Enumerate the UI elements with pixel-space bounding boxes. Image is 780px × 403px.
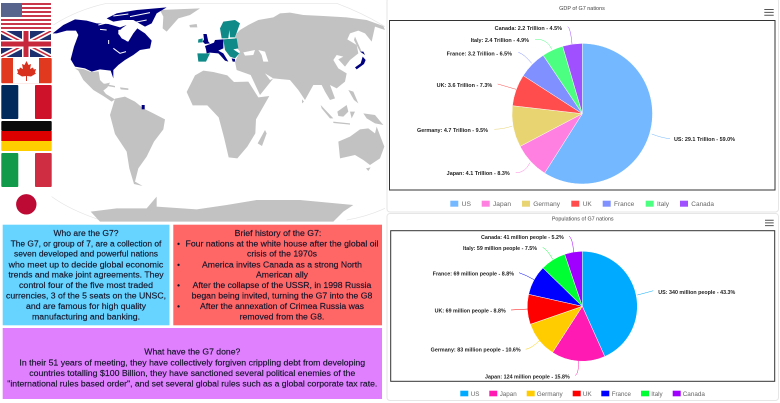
- population data labels: France: 69 million people - 8.8%: [433, 272, 515, 278]
- gdp legend: UK: [583, 201, 592, 208]
- panel: brief history of the g7: After the annexation of Crimea Russia was: [200, 302, 364, 311]
- chart title: gdp: GDP of G7 nations: [559, 6, 605, 12]
- channels and great lakes: [98, 13, 150, 53]
- gdp legend: Germany: [533, 201, 561, 208]
- panel: what have the g7 done: [3, 328, 382, 399]
- panel: brief history of the g7: •: [177, 281, 180, 290]
- panel: brief history of the g7: •: [177, 239, 180, 248]
- panel: what have the g7 done: "international rules based order", and set several global rules such as a global corporate tax rate.: [7, 380, 377, 389]
- flag: italy: [1, 153, 52, 187]
- gdp pie: [512, 43, 652, 184]
- panel: gdp chart: [387, 0, 778, 212]
- population plot frame: [391, 231, 775, 381]
- population connectors: [511, 236, 653, 375]
- population legend: Japan: [500, 391, 517, 398]
- population data labels: US: 340 million people - 43.3%: [658, 290, 736, 296]
- panel: who are the g7: and are famous for high quality: [26, 302, 146, 311]
- landmass: caribbean: [103, 83, 128, 90]
- panel: brief history of the g7: •: [177, 260, 180, 269]
- sea: black sea: [243, 50, 255, 56]
- sea: persian gulf: [265, 73, 273, 80]
- gdp data labels: UK: 3.6 Trillion - 7.3%: [437, 83, 493, 89]
- southern landmasses: [75, 68, 353, 222]
- population data labels: Germany: 83 million people - 10.6%: [431, 348, 521, 354]
- panel: what have the g7 done: In their 51 years of meeting, they have collectively forgiven crippling debt from developing: [19, 358, 365, 367]
- member: uk: [203, 34, 210, 44]
- panel: brief history of the g7: Brief history of the G7:: [235, 229, 321, 238]
- gdp plot frame: [390, 20, 775, 190]
- panel: brief history of the g7: •: [177, 302, 180, 311]
- gdp legend: [450, 201, 714, 208]
- north america and greenland: [53, 7, 200, 78]
- population legend: UK: [583, 391, 592, 398]
- gdp data labels: Italy: 2.4 Trillion - 4.9%: [471, 38, 530, 44]
- gdp legend: US: [462, 201, 472, 208]
- population pie: [527, 251, 637, 361]
- member: canadian arctic islands: [107, 7, 167, 27]
- population legend: Germany: [537, 391, 563, 398]
- landmass: sri lanka and japan's neighbours: [302, 37, 362, 103]
- chart title: population: Populations of G7 nations: [552, 217, 614, 223]
- icon: population menu: [765, 220, 774, 226]
- panel: brief history of the g7: After the collapse of the USSR, in 1998 Russia: [193, 281, 372, 290]
- flag: germany: [1, 121, 52, 151]
- population legend: Italy: [651, 391, 663, 398]
- lake: hudson bay: [118, 27, 133, 42]
- panel: who are the g7: currencies, 3 of the 5 seats on the UNSC,: [6, 292, 166, 301]
- panel: brief history of the g7: American ally: [256, 271, 308, 280]
- landmass: africa: [187, 71, 269, 158]
- flag: france: [1, 85, 52, 119]
- gdp legend: France: [614, 201, 635, 208]
- flag: canada: [1, 58, 52, 83]
- population data labels: Italy: 59 million people - 7.5%: [463, 246, 538, 252]
- gdp legend: Japan: [493, 201, 511, 208]
- member: french guiana: [142, 105, 145, 109]
- panel: brief history of the g7: Four nations at the white house after the global oil: [186, 239, 379, 248]
- landmass: antarctica: [91, 197, 353, 222]
- panel: who are the g7: control four of the five most traded: [19, 281, 153, 290]
- eu: scandinavia and baltics: [220, 20, 240, 38]
- landmass: madagascar: [258, 130, 267, 146]
- panel: who are the g7: trends and make joint agreements. They: [8, 271, 164, 280]
- population data labels: UK: 69 million people - 8.8%: [435, 308, 506, 314]
- landmass: mexico and central america: [75, 68, 115, 102]
- population legend: US: [471, 391, 480, 398]
- gdp data labels: Germany: 4.7 Trillion - 9.5%: [417, 128, 489, 134]
- member: france germany italy: [205, 39, 228, 62]
- landmass: iceland: [189, 24, 197, 27]
- member: greece: [232, 58, 235, 62]
- eu: spain and portugal: [197, 53, 210, 62]
- panel: brief history of the g7: began being invited, turning the G7 into the G8: [192, 292, 373, 301]
- population data labels: [431, 235, 736, 380]
- panel: who are the g7: [3, 225, 170, 325]
- eu: ireland: [198, 38, 203, 43]
- member: japan: [355, 52, 366, 69]
- panel: what have the g7 done: countries totalling $100 Billion, they have sanctioned several political enemies of the: [29, 369, 356, 378]
- landmass: greenland: [160, 8, 200, 32]
- panel: who are the g7: Who are the G7?: [54, 229, 119, 238]
- population legend: France: [612, 391, 631, 398]
- panel: brief history of the g7: [173, 225, 382, 325]
- gdp legend: Canada: [691, 201, 714, 208]
- flag: united kingdom: [1, 31, 51, 57]
- panel: who are the g7: who meet up to decide global economic: [8, 260, 163, 269]
- world map: [52, 3, 385, 222]
- panel: population chart: [387, 214, 778, 400]
- member: canada and united states: [53, 19, 152, 78]
- flag: japan: [16, 194, 36, 214]
- map outline: [52, 3, 385, 220]
- southeast asia and oceania: [321, 90, 384, 171]
- landmass: new guinea: [363, 113, 383, 125]
- landmass: eurasia: [233, 13, 385, 100]
- landmass: philippines: [348, 90, 358, 103]
- panel: who are the g7: manufacturing and banking.: [32, 312, 140, 321]
- panel: brief history of the g7: crisis of the 1970s: [247, 250, 317, 259]
- panel: who are the g7: seven developed and powerful nations: [14, 250, 158, 259]
- panel: what have the g7 done: What have the G7 done?: [144, 348, 241, 357]
- panel: brief history of the g7: America invites Canada as a strong North: [202, 260, 362, 269]
- gdp data labels: Canada: 2.2 Trillion - 4.5%: [495, 26, 563, 32]
- panel: who are the g7: The G7, or group of 7, are a collection of: [11, 239, 162, 248]
- landmass: australia: [338, 127, 384, 165]
- population data labels: Japan: 124 million people - 15.8%: [485, 374, 570, 380]
- gdp data labels: France: 3.2 Trillion - 6.5%: [447, 52, 513, 58]
- landmass: tasmania: [366, 167, 371, 171]
- landmass: south america: [110, 97, 165, 186]
- population data labels: Canada: 41 million people - 5.2%: [481, 235, 564, 241]
- population legend: [460, 391, 705, 398]
- population legend: Canada: [683, 391, 705, 398]
- flag: united states: [1, 3, 51, 29]
- gdp data labels: US: 29.1 Trillion - 59.0%: [674, 137, 736, 143]
- eurasia and europe: [197, 13, 385, 103]
- panel: brief history of the g7: removed from the G8.: [240, 312, 324, 321]
- icon: gdp menu: [764, 10, 774, 15]
- gdp data labels: [417, 26, 736, 177]
- gdp legend: Italy: [657, 201, 670, 208]
- gdp connectors: [494, 27, 670, 173]
- landmass: indonesia: [321, 105, 355, 125]
- sea: caspian: [258, 50, 268, 62]
- gdp data labels: Japan: 4.1 Trillion - 8.3%: [447, 171, 510, 177]
- eu: central and eastern europe: [223, 38, 239, 58]
